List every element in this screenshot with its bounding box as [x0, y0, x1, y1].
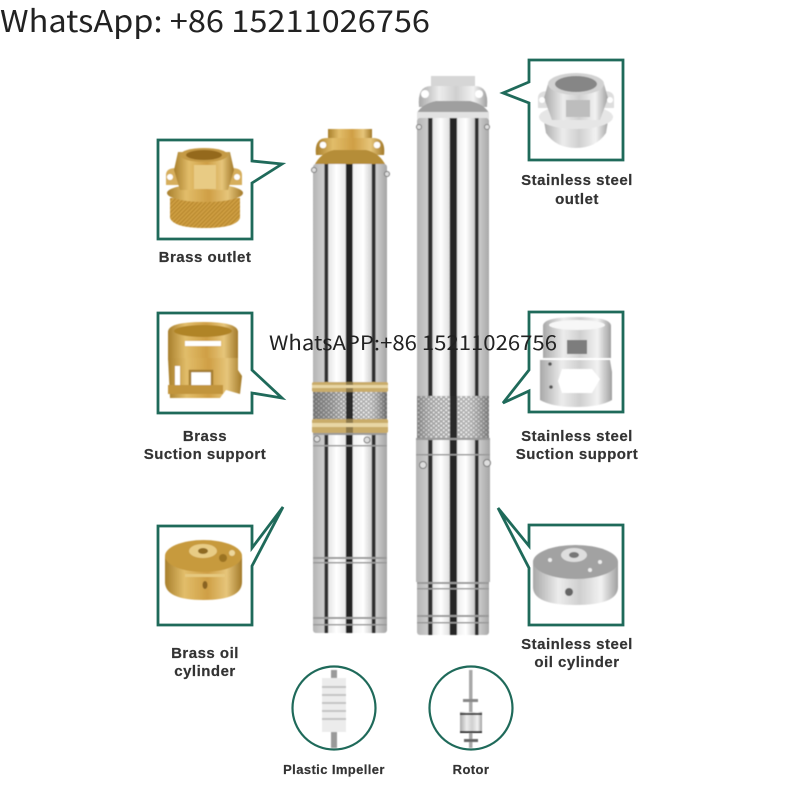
circle frame — [292, 666, 376, 750]
part: stainless steel outlet — [538, 73, 614, 148]
watermark: centre contact: WhatsAPP:+86 15211026756 — [269, 327, 557, 356]
body seams — [416, 438, 490, 624]
label — [521, 172, 633, 208]
label — [516, 428, 638, 463]
label: cylinder — [174, 663, 236, 680]
panel: plastic impeller — [283, 666, 385, 777]
screws — [416, 124, 490, 468]
panel: rotor — [430, 666, 512, 777]
panel: stainless steel suction support — [503, 312, 638, 463]
circle frame — [430, 666, 512, 750]
label: Brass oil — [171, 645, 239, 662]
part: impeller — [322, 670, 346, 748]
part: brass oil cylinder — [165, 540, 242, 600]
label: Suction support — [144, 446, 266, 463]
left pump: brass — [312, 129, 390, 633]
lower sleeve — [416, 438, 490, 582]
callout frame — [158, 507, 283, 625]
label: Brass — [183, 428, 227, 445]
part: stainless steel oil cylinder — [533, 545, 618, 605]
label: oil cylinder — [534, 654, 620, 671]
callout frame — [503, 60, 623, 160]
callout frame — [158, 313, 282, 413]
brass rings — [312, 382, 388, 433]
callout frame — [503, 312, 623, 412]
label — [171, 645, 239, 680]
screws — [312, 168, 390, 443]
mesh strainer — [313, 391, 387, 419]
label: Rotor — [453, 762, 489, 777]
callout frame — [498, 508, 623, 625]
part: stainless steel suction support — [540, 317, 612, 407]
part: brass suction support — [168, 322, 242, 398]
mesh strainer — [417, 396, 489, 438]
label: Stainless steel — [521, 636, 633, 653]
panel: stainless steel outlet — [503, 60, 633, 208]
panel: brass outlet — [158, 140, 282, 266]
body seams — [313, 433, 387, 626]
panel: brass oil cylinder — [158, 507, 283, 680]
steel body — [417, 118, 489, 635]
label — [144, 428, 266, 463]
panel: brass suction support — [144, 313, 282, 463]
label: Stainless steel — [521, 172, 633, 189]
label: Suction support — [516, 446, 638, 463]
part: rotor — [460, 670, 482, 748]
panel: stainless steel oil cylinder — [498, 508, 633, 671]
steel body — [313, 164, 387, 633]
label: Brass outlet — [159, 249, 251, 266]
callout frame — [158, 140, 282, 239]
brass outlet cap — [314, 129, 386, 166]
part: brass outlet — [166, 148, 243, 228]
label: outlet — [555, 191, 599, 208]
steel outlet cap — [417, 76, 489, 119]
label: Plastic Impeller — [283, 762, 385, 777]
right pump: stainless steel — [416, 76, 490, 635]
label: Stainless steel — [521, 428, 633, 445]
label — [521, 636, 633, 671]
